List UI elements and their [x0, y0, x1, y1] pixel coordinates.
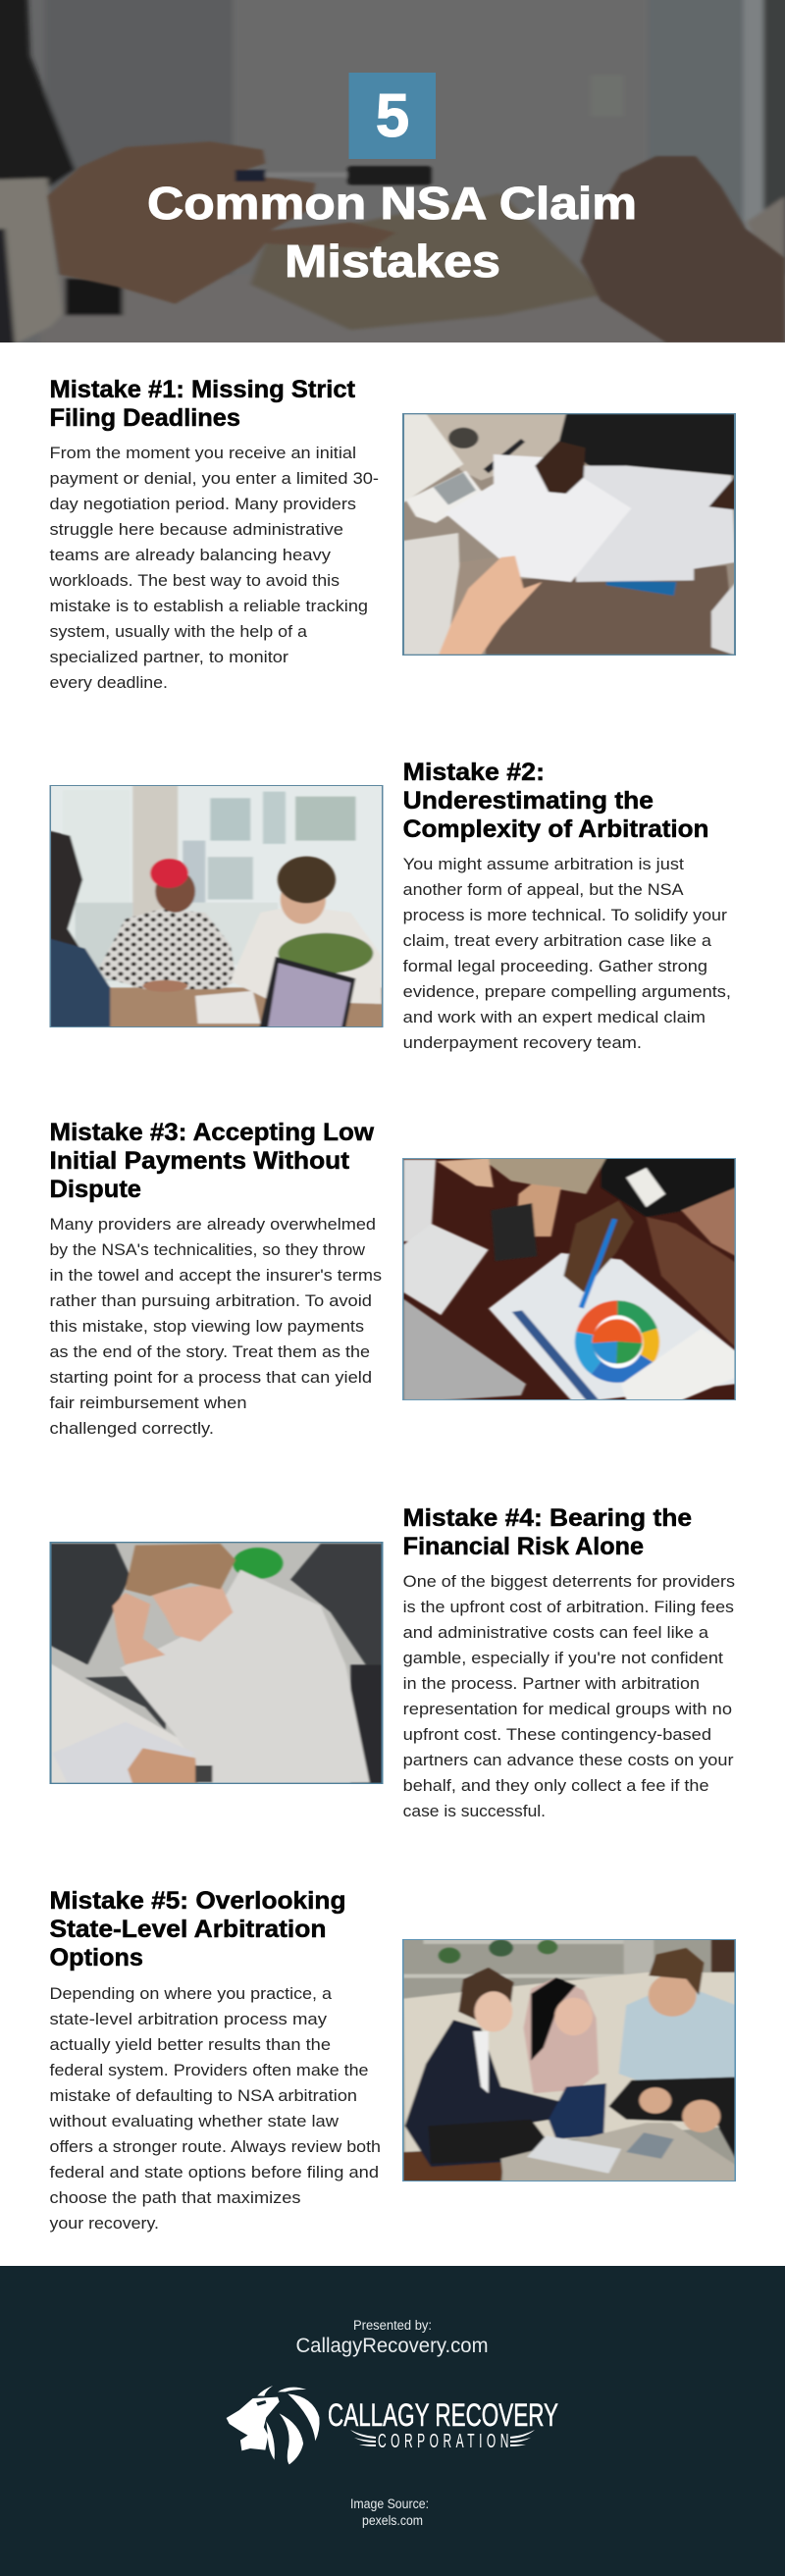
- photo: hands reviewing a pie chart report: [402, 1158, 736, 1400]
- text block: mistake 3: fair reimbursement when: [49, 1394, 247, 1412]
- text block: mistake 5: your recovery.: [49, 2215, 159, 2233]
- logo subtitle: CORPORATION: [378, 2431, 513, 2452]
- text block: mistake 5: federal and state options before filing and: [49, 2164, 379, 2182]
- heading: mistake 1: Mistake #1: Missing Strict: [49, 376, 356, 403]
- text block: mistake 5: without evaluating whether state law: [48, 2113, 339, 2130]
- panel: mistake 2: [49, 759, 731, 1052]
- text block: mistake 3: as the end of the story. Treat them as the: [49, 1343, 370, 1361]
- heading: mistake 2: [403, 759, 708, 843]
- text block: mistake 3: challenged correctly.: [49, 1420, 214, 1438]
- text block: mistake 4: and administrative costs can feel like a: [403, 1624, 708, 1642]
- panel: mistake 4: [49, 1504, 735, 1820]
- text block: mistake 2: claim, treat every arbitration case like a: [403, 932, 711, 950]
- text block: mistake 5: mistake of defaulting to NSA arbitration: [49, 2087, 357, 2105]
- text block: mistake 4: One of the biggest deterrents for providers: [403, 1573, 735, 1591]
- text block: mistake 4: is the upfront cost of arbitration. Filing fees: [403, 1599, 734, 1616]
- panel: mistake 1: [48, 376, 736, 692]
- photo: stressed man in white shirt reading a document: [49, 1542, 383, 1784]
- text block: mistake 3: Many providers are already overwhelmed: [49, 1216, 376, 1234]
- heading: mistake 4: Mistake #4: Bearing the: [403, 1504, 692, 1532]
- logo: Callagy Recovery Corporation: [227, 2386, 558, 2464]
- heading: mistake 5: [49, 1887, 345, 1971]
- heading: mistake 2: Underestimating the: [403, 787, 654, 815]
- text block: mistake 1: system, usually with the help of a: [49, 623, 307, 641]
- heading: mistake 3: Initial Payments Without: [49, 1147, 350, 1175]
- text block: mistake 3: rather than pursuing arbitration. To avoid: [49, 1292, 372, 1310]
- text block: mistake 5: [48, 1985, 381, 2233]
- badge: number 5: 5: [376, 82, 409, 150]
- heading: mistake 2: Complexity of Arbitration: [403, 815, 708, 843]
- text block: mistake 3: starting point for a process that can yield: [49, 1369, 372, 1387]
- logo wordmark: CALLAGY RECOVERY: [328, 2397, 558, 2433]
- text block: mistake 1: specialized partner, to monitor: [49, 649, 289, 666]
- text block: mistake 3: in the towel and accept the insurer's terms: [49, 1267, 382, 1285]
- panel: mistake 5: [48, 1887, 736, 2233]
- text block: mistake 5: federal system. Providers often make the: [49, 2062, 369, 2079]
- text block: mistake 2: underpayment recovery team.: [403, 1034, 642, 1052]
- text block: mistake 2: You might assume arbitration is just: [403, 856, 685, 873]
- text block: mistake 2: evidence, prepare compelling arguments,: [403, 983, 731, 1001]
- hero banner: [0, 0, 785, 349]
- text block: mistake 4: behalf, and they only collect a fee if the: [403, 1777, 708, 1795]
- text block: mistake 1: every deadline.: [49, 674, 168, 692]
- heading: mistake 1: Filing Deadlines: [49, 404, 240, 432]
- heading: mistake 4: Financial Risk Alone: [403, 1533, 644, 1560]
- text block: mistake 2: process is more technical. To solidify your: [403, 907, 728, 924]
- text block: mistake 1: struggle here because administrative: [49, 521, 343, 539]
- heading: mistake 5: Options: [49, 1944, 143, 1971]
- heading: mistake 3: Mistake #3: Accepting Low: [49, 1119, 375, 1146]
- heading: mistake 3: Dispute: [49, 1176, 141, 1203]
- heading: mistake 5: State-Level Arbitration: [49, 1916, 326, 1943]
- photo: hands exchanging paperwork on a desk: [402, 413, 736, 656]
- text block: mistake 3: [49, 1216, 382, 1438]
- text block: mistake 1: [48, 445, 379, 692]
- text block: mistake 5: Depending on where you practice, a: [49, 1985, 332, 2003]
- text block: mistake 4: [403, 1573, 735, 1820]
- text block: mistake 1: teams are already balancing heavy: [49, 547, 332, 564]
- photo: three people talking on a sofa: [402, 1939, 736, 2182]
- text block: mistake 2: formal legal proceeding. Gather strong: [403, 958, 707, 975]
- heading: mistake 3: [49, 1119, 375, 1203]
- title: [147, 178, 637, 287]
- heading: mistake 4: [403, 1504, 692, 1560]
- hero photo: hands passing a pen over a document: [0, 0, 785, 342]
- title: Mistakes: [285, 236, 500, 287]
- text block: mistake 2: and work with an expert medical claim: [403, 1009, 706, 1026]
- image source label: Image Source:: [350, 2497, 429, 2511]
- text block: mistake 2: [403, 856, 731, 1052]
- text block: mistake 4: upfront cost. These contingency-based: [403, 1726, 711, 1744]
- website: CallagyRecovery.com: [296, 2335, 489, 2357]
- text block: mistake 4: in the process. Partner with arbitration: [403, 1675, 700, 1693]
- text block: mistake 4: partners can advance these costs on your: [403, 1752, 734, 1769]
- text block: mistake 1: mistake is to establish a reliable tracking: [49, 598, 368, 615]
- text block: mistake 2: another form of appeal, but the NSA: [403, 881, 684, 899]
- text block: mistake 3: by the NSA's technicalities, so they throw: [49, 1241, 365, 1259]
- panel: mistake 3: [49, 1119, 736, 1438]
- text block: mistake 1: From the moment you receive an initial: [49, 445, 356, 462]
- heading: mistake 1: [49, 376, 356, 432]
- text block: mistake 1: workloads. The best way to avoid this: [48, 572, 340, 590]
- icon: lion head: [226, 2386, 320, 2465]
- text block: mistake 3: this mistake, stop viewing low payments: [49, 1318, 364, 1336]
- text block: mistake 5: choose the path that maximizes: [49, 2189, 300, 2207]
- text block: mistake 5: state-level arbitration process may: [49, 2011, 328, 2028]
- presented by label: Presented by:: [353, 2318, 432, 2333]
- text block: mistake 4: gamble, especially if you're not confident: [403, 1650, 724, 1667]
- photo: three colleagues meeting at a table: [49, 785, 383, 1027]
- text block: mistake 5: actually yield better results than the: [49, 2036, 331, 2054]
- heading: mistake 5: Mistake #5: Overlooking: [49, 1887, 345, 1915]
- image source value: pexels.com: [362, 2513, 423, 2528]
- text block: mistake 4: representation for medical groups with no: [403, 1701, 732, 1718]
- text block: mistake 1: payment or denial, you enter a limited 30-: [49, 470, 379, 488]
- text block: mistake 5: offers a stronger route. Always review both: [49, 2138, 381, 2156]
- footer panel: [0, 2266, 785, 2576]
- text block: mistake 4: case is successful.: [403, 1803, 546, 1820]
- title: Common NSA Claim: [147, 178, 637, 229]
- text block: mistake 1: day negotiation period. Many providers: [49, 496, 356, 513]
- logo wings: [350, 2430, 535, 2446]
- heading: mistake 2: Mistake #2:: [403, 759, 545, 786]
- badge: number 5: [349, 73, 436, 159]
